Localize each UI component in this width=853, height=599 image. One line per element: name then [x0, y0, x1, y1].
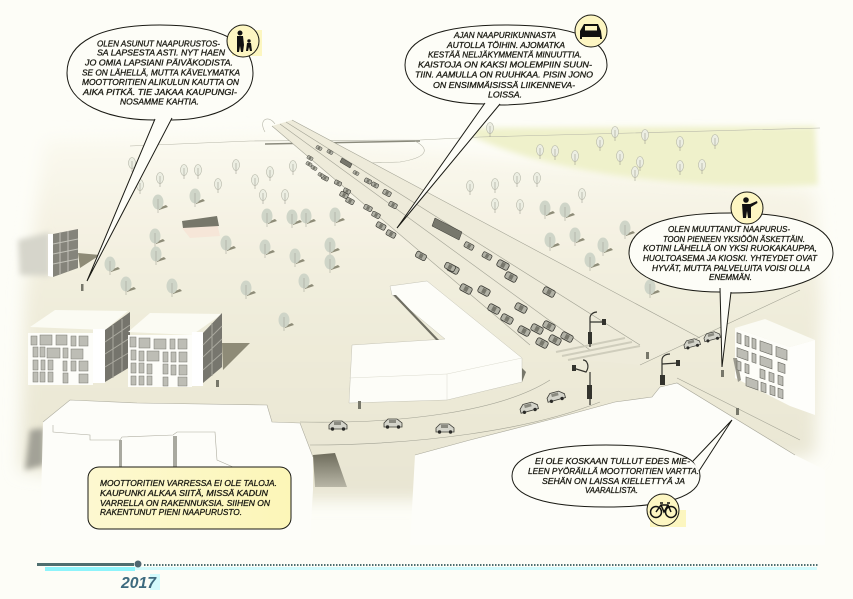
callout: neighbourhood note: RAKENTUNUT PIENI NAAPURUSTO.: [100, 508, 242, 517]
bubble: car commuter: KESTÄÄ NELJÄKYMMENTÄ MINUUTTIA.: [428, 51, 582, 60]
trams: [340, 158, 462, 240]
building: right with windows: [733, 319, 815, 415]
bubble: new resident: HUOLTOASEMA JA KIOSKI. YHTEYDET OVAT: [643, 254, 818, 263]
bubble: new resident: ENEMMÄN.: [709, 273, 752, 282]
main road surface: [272, 120, 700, 365]
cars: [306, 145, 721, 434]
bubble: car commuter: TIIN. AAMULLA ON RUUHKAA. PISIN JONO: [415, 71, 593, 80]
bubble: cyclist: EI OLE KOSKAAN TULLUT EDES MIE-: [535, 457, 690, 466]
bubble: car commuter: LOISSA.: [488, 90, 522, 99]
callout: neighbourhood note: VARRELLA ON RAKENNUKSIA. SIIHEN ON: [100, 499, 270, 508]
bubble: resident with child: SE ON LÄHELLÄ, MUTTA KÄVELYMATKA: [82, 68, 240, 78]
crosswalk: [556, 338, 640, 360]
trees: [104, 122, 718, 331]
building: upper left: [18, 229, 100, 277]
panel: street scene illustration: [18, 119, 825, 545]
bubble: new resident: [629, 213, 833, 367]
bubble: car commuter: KAISTOJA ON KAKSI MOLEMPIIN SUUN-: [418, 60, 592, 69]
bubble: resident with child: SA LAPSESTA ASTI. NYT HAEN: [97, 48, 225, 58]
callout: neighbourhood note: [88, 467, 291, 529]
callout: neighbourhood note: MOOTTORITIEN VARRESSA EI OLE TALOJA.: [100, 479, 277, 488]
building: central L-shaped: [349, 281, 526, 403]
bubble: cyclist: LEEN PYÖRÄILLÄ MOOTTORITIEN VARTTA.: [528, 467, 699, 476]
year label: 2017: [120, 575, 157, 592]
horizon lines: [130, 119, 820, 164]
bubble: resident with child: [67, 25, 253, 281]
bubble: resident with child: OLEN ASUNUT NAAPURUSTOS-: [97, 40, 220, 48]
bubble: new resident: HYVÄT, MUTTA PALVELUITA VOISI OLLA: [652, 264, 810, 273]
building shadow: [313, 453, 347, 487]
building: left block: [28, 310, 130, 385]
bubble: new resident: TOON PIENEEN YKSIÖÖN ÄSKETTÄIN.: [663, 235, 805, 244]
timeline: [37, 560, 818, 592]
bubble: cyclist: VAARALLISTA.: [585, 486, 638, 495]
road network: [272, 120, 800, 445]
pedestrians: [81, 284, 739, 415]
bubble: resident with child: AIKA PITKÄ. TIE JAKAA KAUPUNGI-: [82, 88, 237, 97]
foreground building right: [410, 383, 825, 545]
icon: pointing person: [731, 192, 763, 224]
bubble: new resident: OLEN MUUTTANUT NAAPURUS-: [668, 225, 790, 234]
bubble: car commuter: AJAN NAAPURIKUNNASTA: [453, 31, 556, 40]
bubble: resident with child: MOOTTORITIEN ALIKULUN KAUTTA ON: [82, 78, 239, 87]
bubble: cyclist: SEHÄN ON LAISSA KIELLETTYÄ JA: [542, 477, 685, 486]
traffic lights: [572, 312, 680, 405]
building: right block: [128, 313, 250, 387]
green park area: [470, 126, 818, 186]
bubble: car commuter: AUTOLLA TÖIHIN. AJOMATKA: [446, 41, 565, 50]
road lane lines: [272, 120, 800, 445]
far shelter: [182, 216, 220, 238]
bubble: new resident: KOTINI LÄHELLÄ ON YKSI RUOKAKAUPPA,: [643, 244, 817, 253]
icon: bicycle: [647, 494, 686, 527]
ground: [20, 135, 822, 500]
bubble: car commuter: [397, 25, 607, 228]
bubble: car commuter: ON ENSIMMÄISISSÄ LIIKENNEVA-: [433, 81, 575, 90]
icon: car: [575, 15, 607, 47]
callout: neighbourhood note: KAUPUNKI ALKAA SIITÄ, MISSÄ KADUN: [100, 489, 268, 498]
bubble: cyclist: [512, 420, 732, 507]
foreground building left: [40, 400, 313, 540]
grey edge of left building: [25, 428, 44, 470]
bubble: resident with child: NOSAMME KAHTIA.: [120, 98, 199, 106]
bubble: resident with child: JO OMIA LAPSIANI PÄIVÄKODISTA.: [84, 58, 233, 68]
icon: adult and child: [227, 25, 262, 57]
